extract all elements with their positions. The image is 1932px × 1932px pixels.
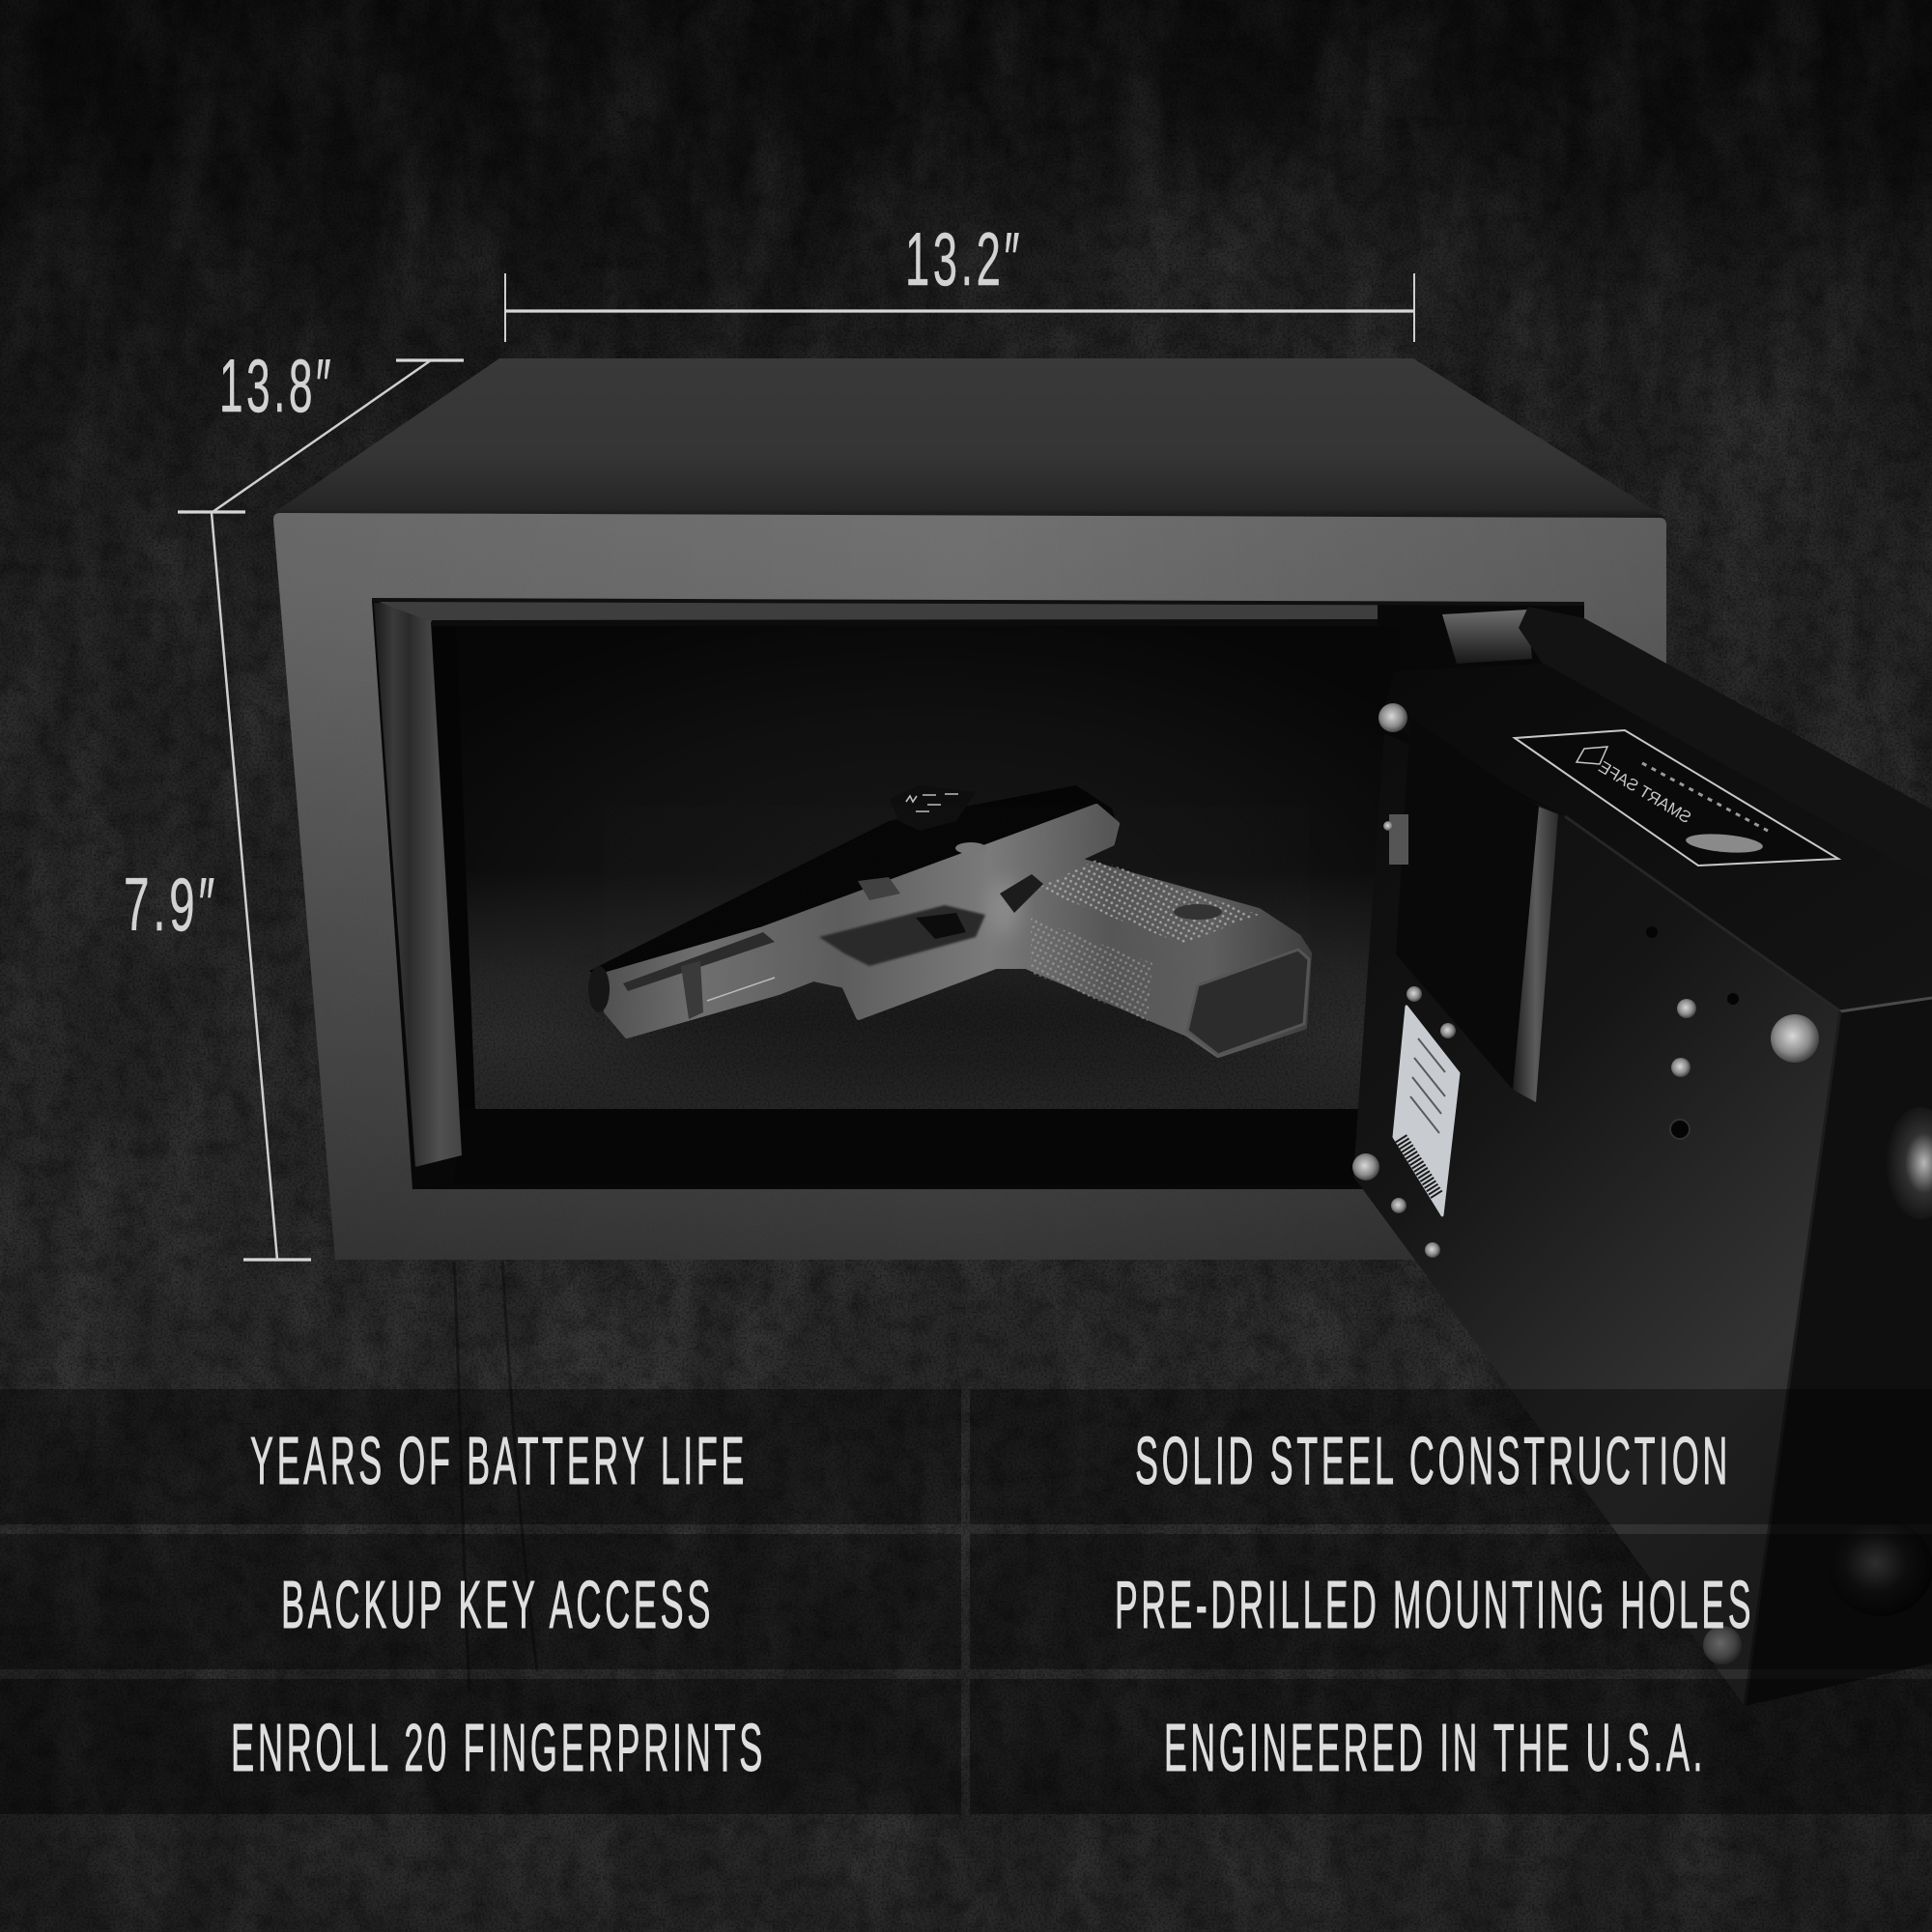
grip stippling upper	[1037, 860, 1259, 944]
row 3 left: ENROLL 20 FINGERPRINTS	[231, 1710, 766, 1785]
row 1 right	[970, 1389, 1932, 1524]
dimension: height 7.9 inches: 7.9″	[124, 862, 218, 947]
knob lower	[1829, 1520, 1932, 1616]
back wall	[454, 623, 1401, 1111]
battery compartment	[1396, 718, 1558, 1102]
row 3 right	[970, 1679, 1932, 1814]
dimension: depth 13.8 inches	[178, 343, 464, 512]
trigger	[916, 913, 966, 939]
dark left wall strip	[432, 623, 475, 1155]
bolts	[1352, 703, 1819, 1258]
row 1 left	[0, 1389, 961, 1524]
dimension: depth 13.8 inches: 13.8″	[219, 343, 334, 428]
row 2 right	[970, 1534, 1932, 1669]
safe body	[273, 358, 1666, 1260]
hinge	[1442, 610, 1532, 664]
chrome foot bolt	[1703, 1626, 1742, 1664]
door-frame left step	[374, 603, 462, 1167]
dimension: width 13.2 inches: 13.2″	[905, 216, 1023, 301]
safe opening interior	[372, 600, 1584, 1189]
door outer side panel	[1745, 996, 1932, 1706]
barrel	[588, 966, 610, 1012]
feature table	[0, 1389, 1932, 1814]
white serial label	[1394, 1007, 1459, 1215]
grip stippling lower	[1031, 918, 1152, 1021]
pistol slide	[589, 785, 1117, 995]
door inner flange	[1381, 664, 1932, 1011]
door inner body	[1353, 733, 1840, 1706]
red-dot optic	[890, 785, 976, 831]
carpet floor	[468, 905, 1372, 1109]
dimension: height 7.9 inches	[124, 513, 311, 1260]
door-frame top step	[374, 600, 1378, 623]
metal instruction plate	[1515, 730, 1838, 866]
slide lock and levers	[858, 877, 900, 900]
rail shading	[623, 932, 775, 991]
metal instruction plate: SMART SAFE	[1596, 757, 1694, 827]
safe top face	[273, 358, 1666, 518]
open safe door	[1352, 607, 1932, 1706]
lower ledge	[454, 1109, 1391, 1184]
shadow under door	[1381, 1217, 1835, 1729]
latch tab	[1389, 814, 1408, 865]
safe front frame	[273, 513, 1666, 1260]
row 2 left: BACKUP KEY ACCESS	[281, 1567, 714, 1642]
pistol frame and grip	[604, 807, 1309, 1055]
pistol on carpet	[588, 785, 1309, 1072]
door top strip	[1519, 607, 1932, 884]
row 1 left: YEARS OF BATTERY LIFE	[250, 1423, 748, 1498]
row 2 left	[0, 1534, 961, 1669]
trigger guard opening	[819, 905, 985, 966]
dimension: width 13.2 inches	[505, 216, 1414, 342]
magazine base plate	[1187, 950, 1309, 1055]
knob upper	[1886, 1107, 1932, 1219]
frame highlights	[989, 879, 1020, 937]
row 3 left	[0, 1679, 961, 1814]
